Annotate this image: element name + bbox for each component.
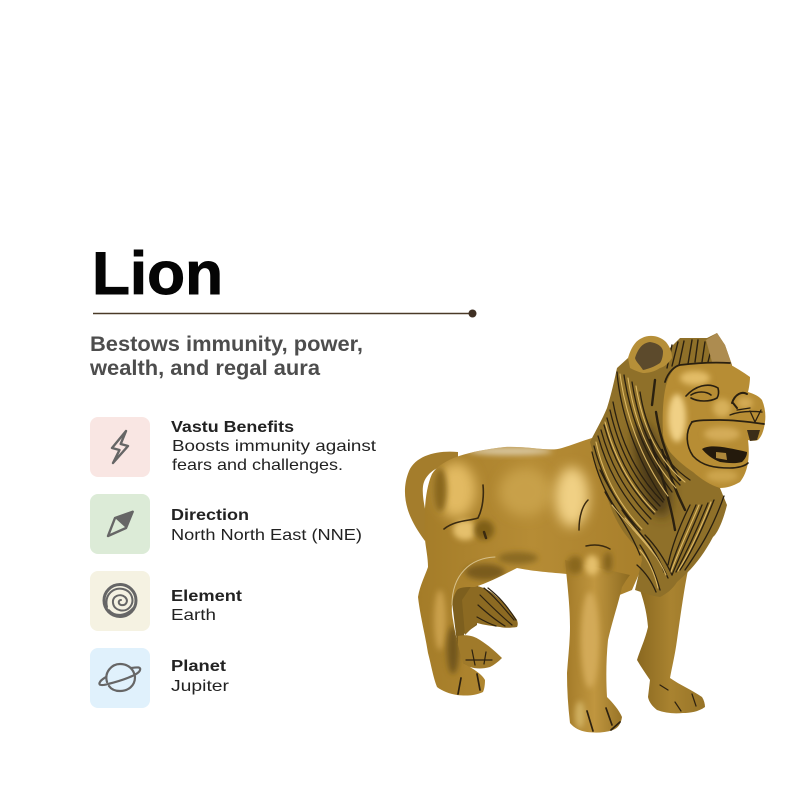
- mane: [590, 333, 732, 597]
- body shading: [433, 447, 612, 729]
- body: [418, 438, 645, 733]
- body creases: [444, 485, 610, 605]
- text: direction: Direction: [171, 507, 249, 524]
- text: vastu benefits: Vastu Benefits: [171, 419, 294, 436]
- panel: planet: [90, 648, 230, 708]
- lion statue: [405, 333, 765, 733]
- subtitle: [89, 333, 363, 380]
- text: direction: North North East (NNE): [171, 527, 362, 544]
- text: planet: [171, 658, 230, 695]
- tail: [405, 452, 458, 541]
- panel: vastu benefits: [90, 417, 377, 477]
- infographic canvas: [90, 250, 766, 733]
- text: vastu benefits: Boosts immunity against: [172, 438, 377, 455]
- text: planet: Planet: [171, 658, 227, 675]
- panel: element: [90, 571, 243, 631]
- text: planet: Jupiter: [171, 678, 230, 695]
- text: element: Earth: [171, 607, 216, 624]
- title: Lion: [92, 240, 223, 307]
- text: element: Element: [171, 588, 243, 605]
- text: vastu benefits: [171, 419, 377, 474]
- face: [663, 363, 765, 488]
- paws and claws: [458, 674, 620, 731]
- ear: [628, 333, 732, 373]
- subtitle: Bestows immunity, power,: [90, 333, 363, 356]
- text: element: [171, 588, 243, 624]
- icon: spiral: [90, 571, 150, 631]
- icon: compass: [90, 494, 150, 554]
- icon: lightning bolt: [90, 417, 150, 477]
- text: vastu benefits: fears and challenges.: [172, 457, 343, 474]
- icon: planet: [90, 648, 150, 708]
- panel: direction: [90, 494, 362, 554]
- text: direction: [171, 507, 362, 544]
- subtitle: wealth, and regal aura: [89, 357, 320, 380]
- mane dark centre: [627, 420, 677, 520]
- far legs: [450, 570, 705, 713]
- title divider with dot: [93, 310, 476, 318]
